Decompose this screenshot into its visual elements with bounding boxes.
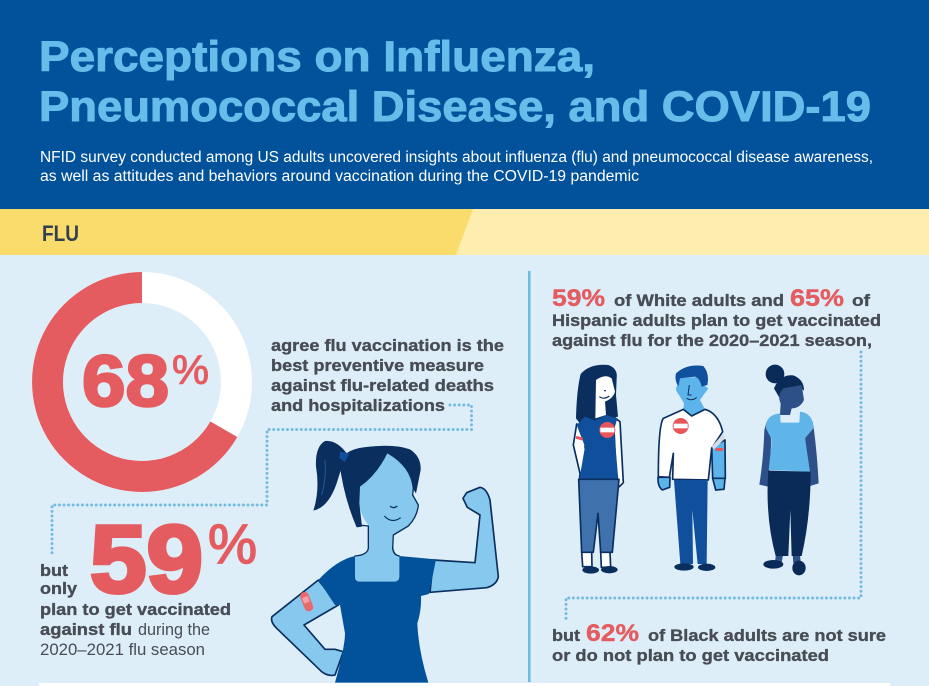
- text: white and hispanic adults: Hispanic adults plan to get vaccinated: [552, 311, 881, 330]
- divider: [528, 271, 530, 682]
- text: but only plan to get vaccinated: [40, 561, 231, 659]
- person: black adult: [759, 365, 819, 575]
- face and neck outline: [355, 488, 418, 556]
- text: but only plan to get vaccinated: during the: [138, 620, 210, 639]
- title: [39, 33, 871, 131]
- hair front: [339, 446, 421, 527]
- text: black adults: [552, 620, 886, 665]
- title: Perceptions on Influenza,: [39, 33, 595, 81]
- text: but only plan to get vaccinated: but: [40, 561, 68, 580]
- text: black adults: 62%: [586, 620, 639, 647]
- neck and chest: [355, 520, 399, 583]
- text: agree flu vaccination: against flu-related deaths: [271, 376, 494, 395]
- section band: flu: [0, 209, 929, 255]
- donut value: 68: [82, 342, 169, 422]
- text: black adults: of Black adults are not sure: [648, 626, 886, 645]
- text: black adults: but: [552, 626, 580, 645]
- text: white and hispanic adults: 59%: [552, 285, 605, 312]
- section heading: FLU: [42, 221, 79, 246]
- big stat: 59 percent: 59: [90, 506, 203, 613]
- white panel edge: [39, 683, 890, 686]
- donut value: %: [172, 347, 209, 393]
- header banner: [0, 0, 929, 209]
- dotted connector: left: [52, 405, 472, 556]
- subtitle: [40, 149, 873, 185]
- text: but only plan to get vaccinated: plan to get vaccinated: [40, 600, 231, 619]
- donut value: [82, 342, 209, 422]
- face: [357, 452, 418, 535]
- text: but only plan to get vaccinated: only: [40, 579, 78, 598]
- bandage: [299, 591, 314, 613]
- text: white and hispanic adults: of: [852, 291, 870, 310]
- subtitle: NFID survey conducted among US adults uncovered insights about influenza (flu) and pneumococcal disease awareness,: [40, 149, 873, 166]
- arm on hip: [272, 580, 343, 675]
- text: white and hispanic adults: [552, 285, 881, 350]
- hair back and ponytail: [313, 441, 347, 511]
- donut chart: 68 percent: [32, 272, 237, 492]
- illustration: woman flexing: [272, 441, 498, 683]
- raised arm: [430, 487, 498, 592]
- text: but only plan to get vaccinated: 2020–2021 flu season: [40, 640, 205, 659]
- subtitle: as well as attitudes and behaviors around vaccination during the COVID-19 pandemic: [40, 168, 639, 185]
- shirt: [318, 556, 436, 683]
- big stat: 59 percent: %: [208, 512, 257, 575]
- text: agree flu vaccination: [271, 336, 504, 415]
- text: but only plan to get vaccinated: against flu: [40, 620, 132, 639]
- person: hispanic adult: [658, 365, 725, 571]
- text: black adults: or do not plan to get vaccinated: [552, 646, 829, 665]
- big stat: 59 percent: [90, 506, 257, 613]
- title: Pneumococcal Disease, and COVID-19: [39, 83, 871, 131]
- smile: [384, 506, 401, 520]
- text: agree flu vaccination: and hospitalizations: [271, 396, 445, 415]
- text: agree flu vaccination: agree flu vaccination is the: [271, 336, 504, 355]
- dotted connector: right: [566, 352, 861, 621]
- text: white and hispanic adults: 65%: [790, 285, 844, 312]
- illustration: three adults: [573, 365, 819, 575]
- person: white adult: [573, 365, 623, 574]
- text: agree flu vaccination: best preventive measure: [271, 356, 484, 375]
- text: white and hispanic adults: of White adults and: [614, 291, 784, 310]
- text: white and hispanic adults: against flu for the 2020–2021 season,: [552, 331, 872, 350]
